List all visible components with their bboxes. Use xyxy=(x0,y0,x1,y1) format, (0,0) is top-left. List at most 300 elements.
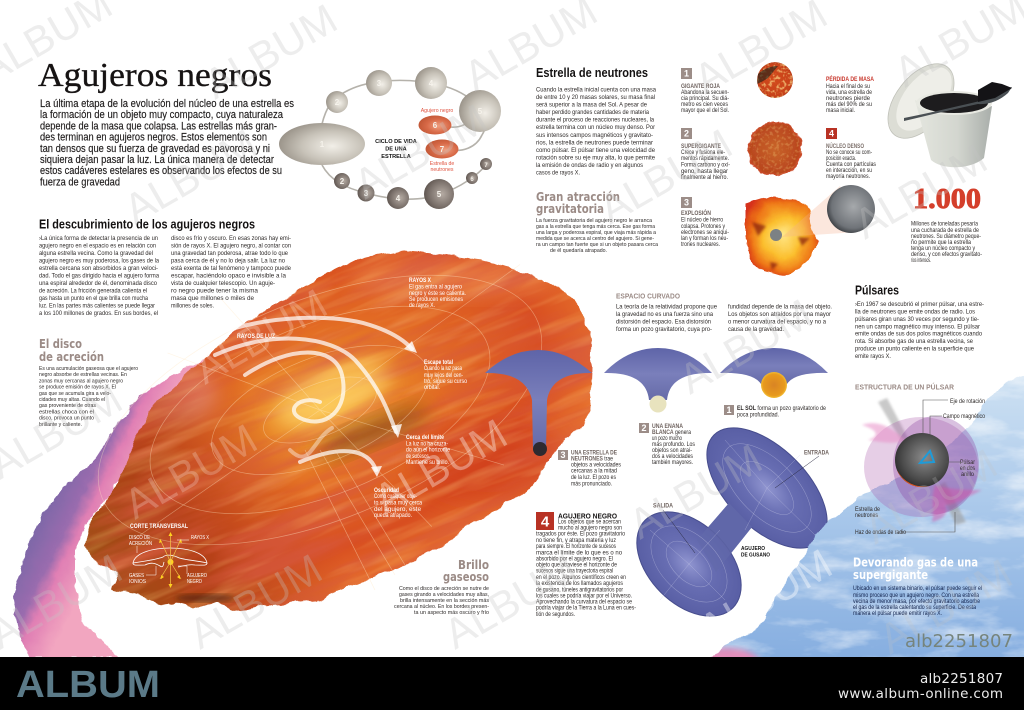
text: gran atraccion gravitatoria: gas a la estrella que tenga más cerca. Ese gas forma xyxy=(536,224,656,230)
text: el disco de acrecion: estrellas choca con el xyxy=(39,409,94,415)
disk ray label: RAYOS DE LUZ xyxy=(237,333,275,340)
watermarks: ALBUM xyxy=(846,135,995,248)
heading: devorando gas: supergigante xyxy=(853,568,928,582)
arrowheads xyxy=(371,341,417,477)
icon: supergiant xyxy=(748,122,802,176)
heading: el disco de acrecion: de acreción xyxy=(39,350,104,364)
heading: brillo gaseoso: Brillo xyxy=(458,558,489,572)
discovery text column 2: sión de rayos X. El agujero negro, al contar con xyxy=(171,242,291,250)
panel: agujero negro: AGUJERO NEGRO xyxy=(558,512,617,520)
text: brillo gaseoso: Como el disco de acreción se nutre de xyxy=(399,586,489,592)
intro text xyxy=(40,98,294,188)
discovery text column 1 xyxy=(39,235,159,317)
text: el disco de acrecion: cidades muy altas. Cuando el xyxy=(39,397,105,403)
discovery text column 1: agujero negro en el espacio es en relación con xyxy=(39,242,156,250)
wormhole illustration: SALIDA xyxy=(653,502,673,510)
pink and purple gas tail xyxy=(13,350,225,657)
callout: cerca del limite: Cerca del límite xyxy=(406,434,444,441)
panel: agujero negro: absorbido por el agujero negro. El xyxy=(536,555,613,562)
label: el sol: poca profundidad. xyxy=(737,412,779,418)
text: 1.000: una cucharada de estrella de xyxy=(911,227,979,234)
heading: gran atraccion gravitatoria xyxy=(536,190,620,216)
text: espacio curvado: causa de la gravedad. xyxy=(728,326,784,333)
heading: estrella de neutrones: Estrella de neutrones xyxy=(536,66,648,80)
pulsar labels: neutrones xyxy=(855,512,878,519)
discovery text column 2: una gravedad tan poderosa, atrae todo lo que xyxy=(171,250,288,257)
step 3: explosion: 3 xyxy=(684,198,689,208)
panel: agujero negro: los cuales se podría viajar por el Universo. xyxy=(536,592,632,599)
label: enana blanca: UNA ENANA xyxy=(652,423,683,430)
step 4: nucleo denso: en interacción, en su xyxy=(826,167,872,174)
star life cycle diagram: 5 xyxy=(437,190,442,199)
text: el disco de acrecion: disco, provoca un punto xyxy=(39,416,94,422)
text: gran atraccion gravitatoria: La fuerza gravitatoria del agujero negro le arranca xyxy=(536,218,653,224)
cross-section diagram: IONIOS xyxy=(129,579,146,585)
text: estrella de neutrones: Cuando la estrella inicial cuenta con una masa xyxy=(536,86,656,94)
discovery text column 2: millones de soles. xyxy=(171,302,214,310)
text: pulsares xyxy=(855,301,984,360)
step 3: explosion: trones nucleares. xyxy=(681,241,720,248)
star life cycle diagram: 2 xyxy=(335,98,340,107)
text: gran atraccion gravitatoria: ra un campo tan fuerte que si un objeto pasara cerca xyxy=(536,242,659,248)
panel: agujero negro: para siempre. El horizonte de sucesos xyxy=(536,543,616,550)
pulsar labels: Púlsar xyxy=(960,459,976,466)
text: pulsares: emite ondas de sus dos polos magnéticos cuando xyxy=(855,331,982,338)
gravity well: sun xyxy=(720,348,828,398)
step 2: supergigante: geno, hasta llegar xyxy=(681,168,729,175)
step 2: supergigante: 2 xyxy=(684,128,689,138)
discovery text column 1: agujero negro es muy poderosa, los gases de la xyxy=(39,258,159,264)
step 3: explosion: colapsa. Protones y xyxy=(681,223,726,230)
text: estrella de neutrones: haber perdido grandes cantidades de materia xyxy=(536,109,649,116)
callout: escape total: Cuando la luz pasa xyxy=(424,365,462,372)
text: estrella de neutrones xyxy=(536,86,656,176)
watermarks: ALBUM xyxy=(871,550,1020,663)
callout: perdida de masa xyxy=(826,75,874,114)
intro text: fuerza de gravedad xyxy=(40,176,120,188)
panel: agujero negro: Los objetos que se acercan xyxy=(558,519,621,526)
text: 1.000: tenga un núcleo compacto y xyxy=(911,245,976,252)
watermarks: ALBUM xyxy=(856,440,1005,553)
text: el disco de acrecion: gas proveniente de otras xyxy=(39,403,96,409)
panel: agujero negro: Aprovechando la curvatura del espacio se xyxy=(536,598,632,606)
callout: rayos X: negro y éste se calienta. xyxy=(409,290,466,297)
panel: agujero negro: sucesos sigue una trayectoria espiral xyxy=(536,568,613,575)
pulsar labels: anillo xyxy=(961,471,974,478)
discovery text column 2: está exenta de tal fenómeno y tampoco puede xyxy=(171,265,291,272)
text: gran atraccion gravitatoria xyxy=(536,218,659,254)
text: estrella de neutrones: casos de rayos X. xyxy=(536,170,580,176)
text: estrella de neutrones: rios, la estrella de neutrones puede terminar xyxy=(536,139,654,146)
text: estrella de neutrones: durante el proceso de reacciones nucleares, la xyxy=(536,117,654,124)
watermarks: ALBUM xyxy=(186,280,335,393)
step 2: supergigante: Crece y fusiona ele- xyxy=(681,149,725,156)
wormhole illustration: DE GUSANO xyxy=(741,552,770,558)
light ray arrows on disk xyxy=(205,318,412,470)
discovery text column 2: masa que millones o miles de xyxy=(171,295,254,302)
text: 1.000: denso, y con efectos gravitato- xyxy=(911,251,982,258)
label: enana blanca: un pozo mucho xyxy=(652,435,682,442)
text: espacio curvado: Los objetos son atraídos por una mayor xyxy=(728,311,832,318)
discovery text column 1: ›La única forma de detectar la presencia de un xyxy=(39,235,158,242)
step 2: supergigante xyxy=(681,128,730,181)
step 2: supergigante: mentos rápidamente. xyxy=(681,155,729,162)
text: gran atraccion gravitatoria: de él quedaría atrapado. xyxy=(550,248,607,254)
title: Agujeros negros xyxy=(38,57,272,94)
text: espacio curvado: distorsión del espacio. Esa distorsión xyxy=(616,318,711,326)
text: espacio curvado xyxy=(616,304,832,333)
callout: rayos X: Se producen emisiones xyxy=(409,296,463,303)
discovery text column 1: luz. En las partes más calientes se puede llegar xyxy=(39,302,156,310)
label: estrella de neutrones: cercanas a la mitad xyxy=(571,468,617,475)
watermarks: ALBUM xyxy=(116,415,265,528)
discovery text column 2: ro negro puede tener la misma xyxy=(171,288,258,294)
cross-section diagram: ACRECIÓN xyxy=(129,540,152,547)
star life cycle diagram: 7 xyxy=(440,145,445,154)
cross-section diagram: CORTE TRANSVERSAL xyxy=(130,523,188,530)
label: enana blanca: objetos son atraí- xyxy=(652,447,692,454)
callout: cerca del limite xyxy=(406,434,450,466)
text: el disco de acrecion: se produce emisión de rayos X. El xyxy=(39,385,116,391)
wormhole illustration xyxy=(617,407,848,636)
wormhole illustration: ENTRADA xyxy=(804,450,829,456)
intro text: estos cadáveres estelares es observando los efectos de su xyxy=(40,165,282,177)
callout: rayos X xyxy=(409,277,466,309)
callout: rayos X: RAYOS X xyxy=(409,277,432,284)
cross-section diagram: RAYOS X xyxy=(191,535,209,541)
callout: oscuridad: del agujero, este xyxy=(374,506,421,513)
footer bar xyxy=(0,657,1024,710)
step 4: nucleo denso: mayoría neutrones. xyxy=(826,173,870,180)
discovery text column 1: a los 100 millones de grados. En sus bordes, el xyxy=(39,310,158,317)
pulsar illustration xyxy=(862,398,982,532)
watermarks: ALBUM xyxy=(436,545,585,658)
panel: agujero negro: la existencia de los llamados agujeros xyxy=(536,580,623,587)
text: gran atraccion gravitatoria: medida que se acerca al centro del agujero. Si gene- xyxy=(536,236,654,242)
callout: perdida de masa: PÉRDIDA DE MASA xyxy=(826,75,874,83)
callout: escape total: Escape total xyxy=(424,359,453,366)
heading: brillo gaseoso: gaseoso xyxy=(443,570,489,584)
heading: gran atraccion gravitatoria: gravitatoria xyxy=(536,202,604,216)
heading: devorando gas: Devorando gas de una xyxy=(853,556,978,570)
heading: gran atraccion gravitatoria: Gran atracción xyxy=(536,190,620,204)
panel: agujero negro: podría viajar de la Tierra a la Luna en cues- xyxy=(536,605,636,612)
pulsar labels: Estrella de xyxy=(855,506,880,513)
text: gran atraccion gravitatoria: una larga y poderosa espiral, que viaja más rápida a xyxy=(536,230,657,236)
star life cycle diagram: 4 xyxy=(429,79,434,88)
panel: agujero negro xyxy=(536,512,636,618)
text: pulsares: ›En 1967 se descubrió el primer púlsar, una estre- xyxy=(855,301,984,308)
heading: discovery: El descubrimiento de los agujeros negros xyxy=(39,218,255,232)
icon: bucket with spoon xyxy=(875,52,1012,167)
watermarks: ALBUM xyxy=(366,410,515,523)
star life cycle diagram: 7 xyxy=(484,163,488,169)
heading: pulsares: Púlsares xyxy=(855,284,899,298)
text: espacio curvado: o menor curvatura del espacio, y no a xyxy=(728,318,826,326)
star life cycle diagram: Estrella de xyxy=(430,161,454,167)
text: pulsares: púlsares giran unas 30 veces por segundo y tie- xyxy=(855,316,979,323)
watermarks: ALBUM xyxy=(591,120,740,233)
text: estrella de neutrones: estrella termina con un núcleo muy denso. Por xyxy=(536,124,656,131)
text: el disco de acrecion: gas que se acumula gira a velo- xyxy=(39,391,111,397)
footer logo: ALBUM xyxy=(16,664,160,706)
text: estrella de neutrones: rotación sobre su eje muy alta, lo que permite xyxy=(536,154,655,161)
label: enana blanca: también mayores. xyxy=(652,459,693,466)
callout: rayos X: de rayos X. xyxy=(409,302,435,309)
text: pulsares: nen un campo magnético muy intenso. El púlsar xyxy=(855,323,981,330)
watermarks: ALBUM xyxy=(181,545,330,658)
intro text: depende de la masa que colapsa. Las estrellas más gran- xyxy=(40,120,277,132)
step 2: supergigante: finalmente al hierro. xyxy=(681,174,728,181)
step 1: gigante roja: mayor que el del Sol. xyxy=(681,107,729,114)
icon: dense core sphere xyxy=(827,185,875,233)
step 4: nucleo denso: posición exacta. xyxy=(826,155,856,162)
text: el disco de acrecion: Es una acumulación gaseosa que el agujero xyxy=(39,366,138,372)
panel: agujero negro: mucho al agujero negro son xyxy=(558,525,622,532)
label: enana blanca: 2 xyxy=(641,423,647,433)
gravity well: neutron star xyxy=(485,350,592,456)
panel: agujero negro: objeto que atraviese el horizonte de xyxy=(536,562,617,569)
step 3: explosion: lan y forman los neu- xyxy=(681,235,728,242)
discovery text column 2: escapar, haciéndolo opaco e invisible a la xyxy=(171,272,286,280)
discovery text column 1: dad. Todo el gas dirigido hacia el agujero forma xyxy=(39,272,159,280)
star life cycle diagram: 6 xyxy=(433,121,438,130)
label: enana blanca: dos a velocidades xyxy=(652,453,693,460)
intro text: La última etapa de la evolución del núcleo de una estrella es xyxy=(40,98,294,110)
discovery text column 2: vista de cualquier telescopio. Un aguje- xyxy=(171,280,275,287)
star life cycle diagram: 1 xyxy=(320,140,325,149)
text: espacio curvado: la gravedad no es una fuerza sino una xyxy=(616,311,713,318)
discovery text column 1: estrella cercana son absorbidos a gran veloci- xyxy=(39,265,158,272)
text: espacio curvado: fundidad depende de la masa del objeto. xyxy=(728,304,832,310)
text: el disco de acrecion xyxy=(39,366,138,428)
text: devorando gas: manera el púlsar puede emitir rayos X. xyxy=(853,610,942,617)
callout: oscuridad: to si pasa muy cerca xyxy=(374,500,422,506)
callout: escape total: tro, sigue su curso xyxy=(424,378,467,385)
watermarks: ALBUM xyxy=(346,95,495,208)
step 3: explosion xyxy=(681,197,729,248)
star life cycle diagram: 4 xyxy=(396,194,401,203)
icon: explosion with core xyxy=(745,186,858,277)
star life cycle diagram: CICLO DE VIDA xyxy=(375,139,417,145)
callout: perdida de masa: vida, una estrella de xyxy=(826,89,872,96)
step 4: nucleo denso: 4 xyxy=(829,128,834,138)
label: estrella de neutrones: de la luz. El pozo es xyxy=(571,474,616,481)
callout: cerca del limite: Mantiene su brillo. xyxy=(406,459,449,466)
panel: agujero negro: marca el límite de lo que es o no xyxy=(536,549,622,556)
heading: el disco de acrecion xyxy=(39,337,104,364)
discovery text column 2: pasa cerca de él y no lo deja salir. La luz no xyxy=(171,258,285,264)
fine lines below disk centre xyxy=(305,450,405,590)
star life cycle diagram: Agujero negro xyxy=(421,108,453,114)
step 1: gigante roja: Abandona la secuen- xyxy=(681,89,729,96)
star life cycle diagram: 5 xyxy=(478,107,483,116)
panel: agujero negro: 4 xyxy=(541,514,550,530)
pulsar labels: Eje de rotación xyxy=(950,398,985,405)
discovery text column 2: disco es frío y oscuro. En esas zonas hay emi- xyxy=(171,235,291,242)
watermarks: ALBUM xyxy=(116,120,265,233)
step 3: explosion: electrones se aniqui- xyxy=(681,229,729,236)
panel: agujero negro: tragados por éste. El pozo gravitatorio xyxy=(536,531,625,538)
step 2: supergigante: Forma carbono y oxí- xyxy=(681,162,730,168)
text: estrella de neutrones: como púlsar. El púlsar tiene una velocidad de xyxy=(536,147,655,154)
watermarks: ALBUM xyxy=(691,540,840,653)
label: estrella de neutrones: UNA ESTRELLA DE xyxy=(571,449,617,456)
discovery text column 1: una espiral alrededor de él, denominada disco xyxy=(39,280,157,287)
text: brillo gaseoso: gases girando a velocidades muy altas, xyxy=(399,592,489,598)
watermark code: alb2251807 xyxy=(905,631,1013,652)
pulsar labels: Campo magnético xyxy=(943,413,985,420)
step 3: explosion: El núcleo de hierro xyxy=(681,216,723,224)
callout: oscuridad xyxy=(374,487,422,519)
discovery text column 1: gas hasta un punto en el que brilla con mucha xyxy=(39,295,148,302)
label: enana blanca: más profundo. Los xyxy=(652,441,695,448)
intro text: la formación de un objeto muy compacto, cuya naturaleza xyxy=(40,109,283,121)
callout: cerca del limite: de sucesos. xyxy=(406,453,430,460)
star life cycle diagram: 2 xyxy=(340,177,345,186)
callout: perdida de masa: Hacia el final de su xyxy=(826,83,870,90)
text: devorando gas: Ubicado en un sistema binario, el púlsar puede seguir el xyxy=(853,585,982,592)
label: el sol: 1 xyxy=(726,405,732,415)
label: estrella de neutrones: 3 xyxy=(560,450,566,460)
callout: oscuridad: Como cualquier obje- xyxy=(374,493,417,500)
step 1: gigante roja: cia principal. Su diá- xyxy=(681,95,729,102)
icon: red giant xyxy=(757,62,793,98)
accretion disk illustration xyxy=(84,250,592,612)
callout: oscuridad: queda atrapado. xyxy=(374,512,412,519)
label: estrella de neutrones: más pronunciado. xyxy=(571,480,612,487)
star life cycle diagram: neutrones xyxy=(430,167,454,173)
text: el disco de acrecion: brillante y caliente. xyxy=(39,422,82,428)
text: 1.000: Millones de toneladas pesaría xyxy=(911,220,978,228)
pulsar labels: en dos xyxy=(960,465,975,472)
watermarks: ALBUM xyxy=(671,290,820,403)
blue supergiant gas cloud xyxy=(710,376,1024,657)
text: 1.000: ño permite que la estrella xyxy=(911,239,971,246)
label: estrella de neutrones: NEUTRONES trae xyxy=(571,455,613,462)
panel: agujero negro: en el pozo. Algunos científicos creen en xyxy=(536,574,626,581)
text: devorando gas: mismo proceso que un agujero negro. Con una estrella xyxy=(853,592,979,599)
gravity well: white dwarf xyxy=(604,348,712,412)
text: pulsares: lla de neutrones que emite ondas de radio. Los xyxy=(855,308,975,315)
footer image code and url xyxy=(838,671,1003,702)
step 1: gigante roja xyxy=(681,68,729,114)
heading: estructura de un pulsar: ESTRUCTURA DE UN PÚLSAR xyxy=(855,382,954,392)
cross-section diagram: NEGRO xyxy=(187,579,202,585)
cross-section diagram: DISCO DE xyxy=(129,535,150,541)
big number 1.000: 1.000 xyxy=(913,184,981,215)
cross-section diagram: GASES xyxy=(129,573,144,579)
text: estrella de neutrones: será superior a la masa del Sol. A pesar de xyxy=(536,102,647,109)
step 1: gigante roja: GIGANTE ROJA xyxy=(681,83,720,90)
callout: escape total: orbital. xyxy=(424,384,440,391)
step 4: nucleo denso: No se conoce su com- xyxy=(826,149,872,156)
label: estrella de neutrones xyxy=(558,449,621,487)
step 4: nucleo denso xyxy=(826,128,876,180)
discovery text column 1: alguna estrella vecina. Como la gravedad del xyxy=(39,250,153,257)
step 4: nucleo denso: NÚCLEO DENSO xyxy=(826,143,864,150)
text: devorando gas xyxy=(853,585,982,617)
discovery text column 1: de acreción. La fricción generada calienta el xyxy=(39,288,147,294)
panel: agujero negro: de gusano, túneles antigravitatorios por xyxy=(536,586,624,593)
callout: cerca del limite: La luz no ha cruza- xyxy=(406,440,448,448)
text: el disco de acrecion: zonas muy cercanas al agujero negro xyxy=(39,378,123,384)
label: estrella de neutrones: objetos a velocidades xyxy=(571,461,621,468)
step 1: gigante roja: metro es cien veces xyxy=(681,101,728,108)
intro text: tan densos que su fuerza de gravedad es pavorosa y ni xyxy=(40,143,270,155)
label: el sol xyxy=(724,405,826,418)
star life cycle diagram: ESTRELLA xyxy=(381,154,411,160)
step 2: supergigante: SUPERGIGANTE xyxy=(681,143,721,150)
panel: agujero negro: no tiene fin, y atrapa materia y luz xyxy=(536,537,616,544)
label: enana blanca: BLANCA genera xyxy=(652,429,691,436)
callout: perdida de masa: neutrones pierde xyxy=(826,95,870,102)
text: estrella de neutrones: de entre 10 y 20 masas solares, su masa final xyxy=(536,94,655,101)
footer image code and url: alb2251807 xyxy=(920,671,1003,687)
gravity grid lines on disk xyxy=(50,190,599,637)
callout: perdida de masa: más del 90% de su xyxy=(826,101,872,108)
star life cycle diagram: 3 xyxy=(364,189,369,198)
callout: escape total xyxy=(424,359,467,391)
intro text: des terminan en agujeros negros. Estos elementos son xyxy=(40,132,267,144)
text: estrella de neutrones: la emisión de ondas de radio y en algunos xyxy=(536,162,643,169)
pulsar labels xyxy=(855,398,985,536)
label: enana blanca xyxy=(639,423,695,466)
star life cycle diagram: 6 xyxy=(470,177,474,183)
star life cycle diagram: 3 xyxy=(377,79,382,88)
cross-section diagram xyxy=(129,523,209,588)
text: pulsares: rota. Si absorbe gas de una estrella vecina, se xyxy=(855,338,973,345)
label: el sol: EL SOL forma un pozo gravitatorio de xyxy=(737,405,826,412)
callout: oscuridad: Oscuridad xyxy=(374,487,399,494)
callout: rayos X: El gas entra al agujero xyxy=(409,284,462,291)
heading: el disco de acrecion: El disco xyxy=(39,337,82,351)
text: espacio curvado: forma un pozo gravitatorio, cuya pro- xyxy=(616,326,712,333)
cross-section diagram: AGUJERO xyxy=(187,573,207,579)
text: 1.000: neutrones. Su diámetro peque- xyxy=(911,233,981,240)
text: 1.000: rios intensos. xyxy=(911,257,931,264)
callout: perdida de masa: masa inicial. xyxy=(826,107,855,114)
text: devorando gas: el gas de la estrella calentando su superficie. De esta xyxy=(853,604,976,611)
text: brillo gaseoso xyxy=(394,586,489,616)
discovery text column 2 xyxy=(171,235,291,310)
wormhole illustration: AGUJERO xyxy=(741,546,765,552)
footer image code and url: www.album-online.com xyxy=(838,686,1003,702)
heading: devorando gas xyxy=(853,556,978,582)
pulsar labels: Haz de ondas de radio xyxy=(855,529,906,536)
text: espacio curvado: La teoría de la relatividad propone que xyxy=(616,304,717,310)
watermarks: ALBUM xyxy=(621,435,770,548)
heading: espacio curvado: ESPACIO CURVADO xyxy=(616,294,681,300)
text: brillo gaseoso: ta un aspecto más oscuro y frío xyxy=(414,610,489,616)
panel: agujero negro: tión de segundos. xyxy=(536,611,575,618)
step 1: gigante roja: 1 xyxy=(684,68,689,78)
text: 1.000 xyxy=(911,220,982,264)
intro text: siquiera dejan pasar la luz. La única manera de detectar xyxy=(40,154,274,166)
text: pulsares: produce un punto caliente en la superficie que xyxy=(855,346,974,353)
text: pulsares: emite rayos X. xyxy=(855,353,891,360)
callout: cerca del limite: do aún el horizonte xyxy=(406,446,450,454)
step 4: nucleo denso: Cuenta con partículas xyxy=(826,161,876,168)
text: devorando gas: vecina de menor masa, por efecto gravitatorio absorbe xyxy=(853,598,980,605)
text: brillo gaseoso: cercana al núcleo. En los bordes presen- xyxy=(394,604,489,610)
star life cycle diagram xyxy=(279,67,501,209)
step 3: explosion: EXPLOSIÓN xyxy=(681,209,711,217)
text: estrella de neutrones: sus intensos campos magnéticos y gravitato- xyxy=(536,132,653,139)
text: el disco de acrecion: negro absorbe de estrellas vecinas. En xyxy=(39,372,127,378)
text: brillo gaseoso: brilla intensamente en la sección más xyxy=(400,598,489,604)
star life cycle diagram: DE UNA xyxy=(385,146,407,152)
